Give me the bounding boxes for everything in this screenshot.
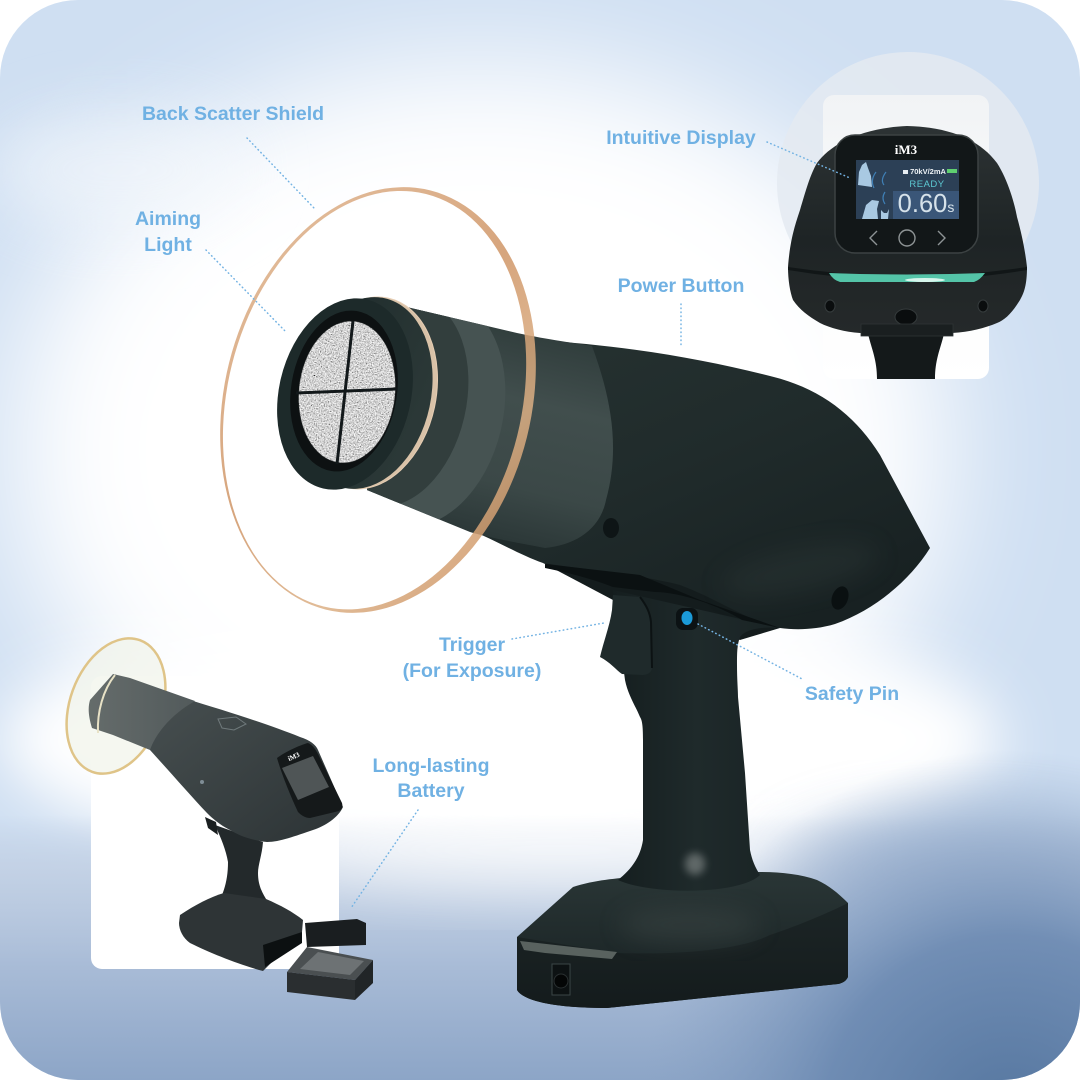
trigger edge	[640, 597, 652, 668]
inset status: READY	[909, 179, 945, 190]
battery label	[300, 952, 364, 975]
label: aiming light: Light	[144, 234, 192, 256]
inset setting readout: 70kV/2mA	[910, 167, 947, 176]
safety pin	[676, 608, 698, 630]
inset logo: iM3	[895, 142, 918, 157]
main device	[259, 281, 930, 1008]
inset buttons	[870, 230, 945, 246]
power port	[552, 964, 570, 995]
device grip	[613, 590, 780, 891]
label: back scatter shield: Back Scatter Shield	[142, 103, 324, 125]
trigger	[600, 595, 652, 675]
inset screw holes	[825, 300, 988, 325]
label: intuitive display: Intuitive Display	[606, 127, 756, 149]
inset teal light strip	[829, 273, 985, 282]
lens	[292, 316, 402, 468]
small display bezel	[277, 743, 342, 818]
base slit	[520, 941, 617, 959]
battery inset card	[91, 676, 339, 969]
inset signal arcs	[872, 172, 886, 204]
inset card	[823, 95, 989, 379]
small power button	[218, 717, 246, 730]
inset head seam	[788, 267, 1027, 280]
device main body	[470, 340, 930, 629]
callout lines	[206, 138, 850, 908]
label: trigger: Trigger	[439, 634, 505, 656]
small compartment	[263, 932, 302, 967]
grip highlight	[685, 853, 705, 875]
inset handle	[868, 334, 944, 379]
small trigger	[205, 817, 218, 835]
small barrel	[89, 674, 195, 750]
small device body	[150, 698, 343, 842]
label: aiming light: Aiming	[135, 208, 201, 230]
underside slot	[545, 564, 780, 628]
inset backdrop circle	[777, 52, 1039, 314]
inset handle tab	[861, 324, 953, 336]
inset readout panel	[893, 191, 959, 219]
device base	[517, 872, 848, 1008]
small logo: iM3	[287, 751, 301, 763]
inset: battery	[49, 624, 373, 1000]
inset: display close-up	[777, 52, 1039, 379]
lens black ring	[279, 303, 409, 479]
body underside backing	[543, 563, 780, 640]
inset screen	[856, 160, 959, 219]
small base	[179, 893, 303, 971]
inset lock icon	[903, 170, 908, 174]
small device dot	[200, 780, 204, 784]
small screen	[282, 756, 329, 800]
lens housing front	[259, 285, 431, 503]
small grip	[215, 825, 268, 902]
battery door	[305, 919, 366, 947]
aiming cross	[296, 321, 397, 464]
collar	[278, 284, 450, 502]
label: safety pin: Safety Pin	[805, 683, 899, 705]
label: trigger: (For Exposure)	[403, 660, 541, 682]
device barrel	[367, 308, 613, 548]
small shield disc	[49, 624, 183, 788]
rear hole	[828, 584, 852, 612]
battery side	[355, 960, 373, 1000]
inset timer: 0.60s	[898, 190, 954, 218]
port socket	[554, 974, 568, 988]
base highlight	[620, 907, 760, 943]
back scatter shield ring	[177, 153, 579, 647]
body highlight	[717, 532, 883, 608]
battery front	[287, 972, 355, 1000]
inset device head	[788, 126, 1027, 333]
barrel hole	[603, 518, 619, 538]
label: long-lasting battery: Long-lasting	[373, 755, 489, 777]
label: long-lasting battery: Battery	[397, 780, 465, 802]
gold collar ring	[281, 284, 455, 502]
base lower section	[517, 903, 848, 1008]
battery top	[287, 947, 373, 980]
inset bezel	[835, 135, 978, 253]
label: power button: Power Button	[618, 275, 744, 297]
inset battery indicator	[947, 169, 957, 173]
inset pet icons	[858, 162, 889, 219]
small collar ring	[98, 675, 115, 733]
inset strip highlight	[905, 278, 945, 282]
